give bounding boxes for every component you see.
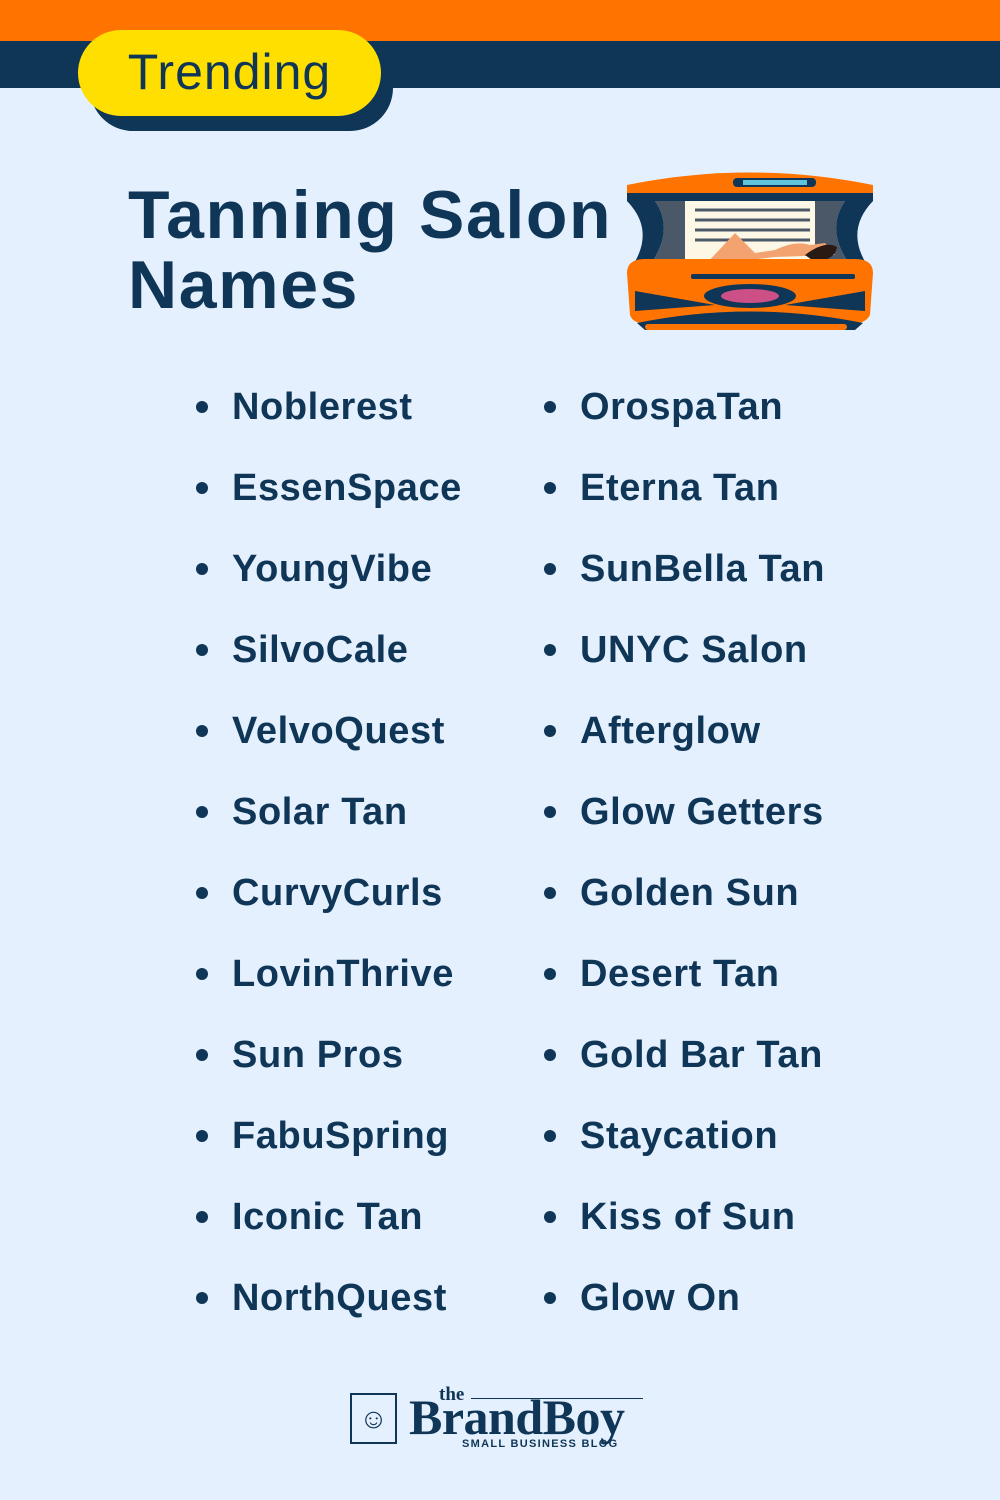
- list: right column: Staycation: [580, 1115, 778, 1157]
- list: right column: Glow On: [580, 1277, 740, 1319]
- list: right column: SunBella Tan: [580, 548, 825, 590]
- list: left column: [196, 386, 462, 1319]
- logo: the: [439, 1384, 464, 1405]
- list: left column: Sun Pros: [232, 1034, 404, 1076]
- list: left column: FabuSpring: [232, 1115, 449, 1157]
- list: left column: YoungVibe: [232, 548, 432, 590]
- list: right column: Desert Tan: [580, 953, 780, 995]
- list: left column: NorthQuest: [232, 1277, 447, 1319]
- icon: logo face: [350, 1393, 397, 1444]
- list: right column: Kiss of Sun: [580, 1196, 796, 1238]
- logo: BrandBoy: [409, 1389, 625, 1445]
- icon: tanning bed: [627, 172, 873, 330]
- list: left column: VelvoQuest: [232, 710, 445, 752]
- list: right column: Gold Bar Tan: [580, 1034, 823, 1076]
- navy band: [0, 41, 1000, 88]
- list: right column: Afterglow: [580, 710, 761, 752]
- trending badge: [78, 30, 393, 131]
- logo: [350, 1384, 643, 1450]
- list: left column: Noblerest: [232, 386, 413, 428]
- list: left column: LovinThrive: [232, 953, 454, 995]
- top orange band: [0, 0, 1000, 41]
- title: Tanning Salon: [128, 177, 612, 253]
- list: right column: Eterna Tan: [580, 467, 780, 509]
- list: right column: Golden Sun: [580, 872, 799, 914]
- list: left column: Iconic Tan: [232, 1196, 423, 1238]
- list: right column: UNYC Salon: [580, 629, 808, 671]
- list: right column: [544, 386, 825, 1319]
- title: Names: [128, 247, 359, 323]
- list: left column: Solar Tan: [232, 791, 408, 833]
- list: right column: Glow Getters: [580, 791, 824, 833]
- trending badge: Trending: [128, 44, 331, 100]
- title: [128, 177, 612, 323]
- list: left column: SilvoCale: [232, 629, 408, 671]
- list: left column: CurvyCurls: [232, 872, 443, 914]
- list: left column: EssenSpace: [232, 467, 462, 509]
- logo: SMALL BUSINESS BLOG: [462, 1438, 619, 1450]
- icon: logo face: ☺: [359, 1403, 388, 1434]
- list: right column: OrospaTan: [580, 386, 783, 428]
